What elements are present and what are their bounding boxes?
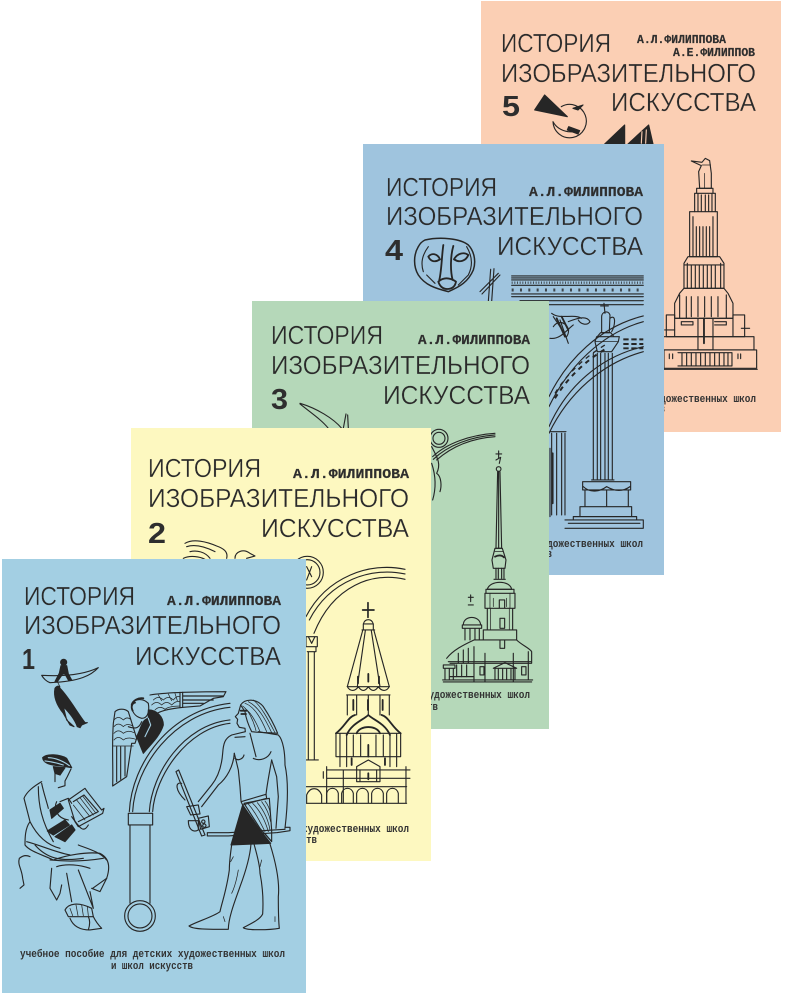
volume number 5: 5 bbox=[502, 91, 520, 123]
author: book 1: А.Л.ФИЛИППОВА bbox=[167, 594, 282, 610]
title: book 3: ИЗОБРАЗИТЕЛЬНОГО bbox=[271, 352, 530, 380]
book 2 cover (yellow) bbox=[131, 428, 431, 861]
ornament arch with rings bbox=[430, 429, 495, 500]
title: book 2: ИСТОРИЯ bbox=[148, 455, 261, 483]
book 1 cover (light blue) bbox=[2, 559, 306, 993]
subtitle: book 3: и школ искусств bbox=[356, 702, 438, 714]
book 3 cover (green) bbox=[252, 301, 549, 729]
volume number 4: 4 bbox=[385, 235, 403, 267]
title: book 1: ИСТОРИЯ bbox=[24, 583, 135, 611]
subtitle: book 1 bbox=[20, 948, 285, 973]
authors: book 5: А.Л.ФИЛИППОВА bbox=[637, 34, 726, 47]
volume number 1: 1 bbox=[22, 644, 35, 676]
title: book 3 bbox=[271, 322, 530, 410]
icon: figure on boat bbox=[42, 659, 98, 728]
medallion and arch bbox=[291, 556, 405, 760]
arch and column bbox=[125, 703, 230, 931]
subtitle: book 2: и школ искусств bbox=[235, 835, 317, 847]
icon: dark triangles above the tower bbox=[605, 125, 653, 144]
subtitle: book 1: и школ искусств bbox=[111, 961, 193, 973]
author: book 4: А.Л.ФИЛИППОВА bbox=[529, 185, 644, 201]
title: book 5: ИЗОБРАЗИТЕЛЬНОГО bbox=[501, 60, 756, 88]
title: book 4: ИСТОРИЯ bbox=[386, 174, 497, 202]
subtitle: book 5: учебное пособие для детских художественных школ bbox=[491, 393, 756, 406]
title: book 1: ИЗОБРАЗИТЕЛЬНОГО bbox=[24, 612, 281, 640]
author: book 3: А.Л.ФИЛИППОВА bbox=[418, 333, 531, 349]
title: book 3: ИСТОРИЯ bbox=[271, 322, 383, 350]
Egyptian man figure bbox=[176, 700, 290, 930]
title: book 5: ИСТОРИЯ bbox=[501, 30, 611, 58]
title: book 2: ИСКУССТВА bbox=[261, 515, 409, 543]
subtitle: book 2: учебное пособие для детских художественных школ bbox=[144, 823, 409, 836]
subtitle: book 3 bbox=[265, 689, 530, 714]
authors: book 5: А.Е.ФИЛИППОВ bbox=[673, 47, 755, 60]
leaf ornament bbox=[300, 403, 348, 428]
subtitle: book 1: учебное пособие для детских художественных школ bbox=[20, 948, 285, 961]
icon: constructivist triangle and circle bbox=[535, 95, 586, 138]
icon: lion head bbox=[415, 238, 475, 292]
title: book 2: ИЗОБРАЗИТЕЛЬНОГО bbox=[148, 485, 409, 513]
title: book 4: ИСКУССТВА bbox=[497, 233, 643, 261]
icon: crossed tools bbox=[480, 269, 500, 302]
woman with lyre figure bbox=[19, 755, 109, 930]
title: book 1: ИСКУССТВА bbox=[135, 643, 281, 671]
title: book 1 bbox=[24, 583, 281, 671]
title: book 5: ИСКУССТВА bbox=[611, 89, 756, 117]
subtitle: book 4 bbox=[378, 538, 643, 561]
subtitle: book 5 bbox=[491, 393, 756, 416]
volume number 2: 2 bbox=[148, 518, 166, 550]
volume number 3: 3 bbox=[271, 384, 288, 416]
authors: book 5 bbox=[637, 34, 755, 60]
subtitle: book 4: учебное пособие для детских художественных школ bbox=[378, 538, 643, 551]
entablature, arch and Alexander column bbox=[512, 276, 643, 528]
title: book 5 bbox=[501, 30, 756, 117]
icon: angel with wings bbox=[113, 692, 226, 786]
subtitle: book 3: учебное пособие для детских художественных школ bbox=[265, 689, 530, 702]
title: book 4: ИЗОБРАЗИТЕЛЬНОГО bbox=[386, 203, 643, 231]
palace of soviets illustration bbox=[663, 158, 757, 369]
subtitle: book 2 bbox=[144, 823, 409, 847]
subtitle: book 4: и школ искусств bbox=[470, 549, 552, 561]
subtitle: book 5: и школ искусств bbox=[583, 404, 665, 416]
book 5 cover (peach) bbox=[481, 1, 781, 432]
title: book 4 bbox=[386, 174, 643, 261]
book 4 cover (blue) bbox=[363, 144, 664, 575]
Peter and Paul cathedral bbox=[443, 451, 533, 682]
author: book 2: А.Л.ФИЛИППОВА bbox=[293, 467, 410, 483]
church of the Ascension bbox=[306, 603, 410, 803]
title: book 3: ИСКУССТВА bbox=[383, 382, 530, 410]
title: book 2 bbox=[148, 455, 409, 543]
bird ornament bbox=[183, 541, 255, 559]
